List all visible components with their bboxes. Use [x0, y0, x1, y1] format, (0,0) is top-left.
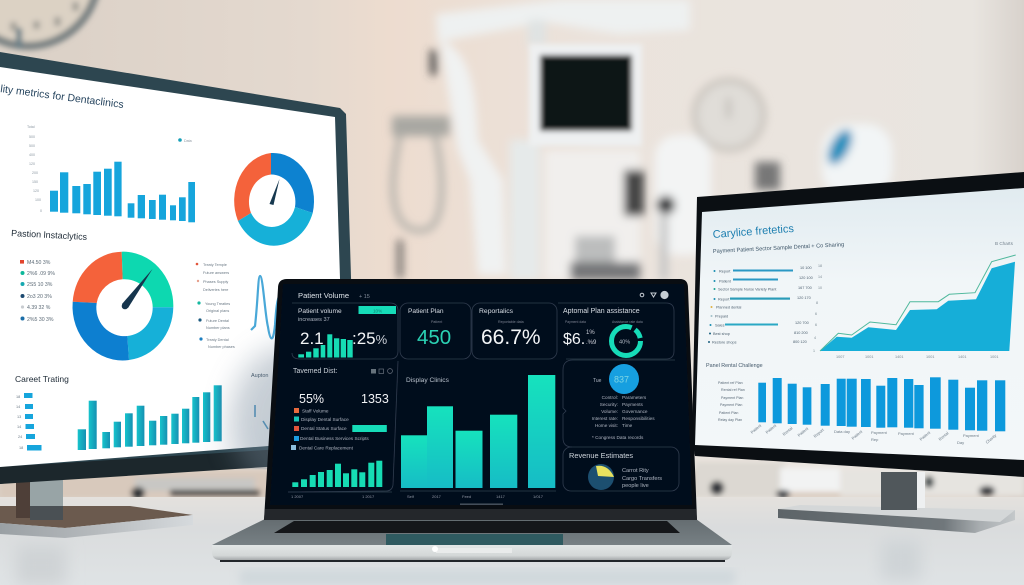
card: patient volume: increases 37 [298, 317, 330, 323]
panel: revenue estimates: people live [622, 483, 649, 489]
panel: blue metric: Security: [600, 402, 618, 407]
panel: treatment data [288, 361, 398, 499]
area chart: 1007 [836, 355, 844, 359]
area chart: 1401 [895, 355, 903, 359]
metric list: 10 100 [800, 266, 812, 270]
panel: blue metric: Tue [593, 378, 602, 384]
metric list: 810 200 [794, 331, 808, 335]
side chart fragment: Aupton [251, 373, 268, 379]
right monitor stand [778, 472, 1015, 533]
rotated tick labels: Day [957, 440, 964, 445]
bar chart: bottom [78, 385, 222, 450]
panel: treatment data: 1 2017 [362, 494, 375, 499]
bar chart: top: Data [184, 139, 192, 143]
desk surface [0, 497, 1024, 585]
keyboard [274, 521, 680, 533]
panel: blue metric: Interest rate: [592, 416, 618, 421]
panel: blue metric: Responsibilities [622, 416, 655, 421]
panel: blue metric: Volume: [601, 409, 618, 414]
panel: blue metric: 837 [614, 374, 629, 384]
side legend: Treaty Dental [206, 338, 229, 342]
row labels: Rental ref Plan [721, 388, 745, 392]
card: optimal plan assistance [558, 303, 674, 359]
area chart: 14 [818, 275, 822, 279]
rotated tick labels: Payment [963, 433, 980, 438]
metric list: Best shop [713, 332, 730, 336]
panel: blue metric: * Congress Data records [592, 435, 644, 440]
mini horizontal bars [16, 393, 42, 450]
left monitor stand [0, 478, 193, 538]
side chart fragment [251, 373, 268, 429]
donut legend: 2о3 20 3% [27, 294, 52, 300]
panel: blue metric: Time [622, 423, 633, 428]
panel: display clinics chart: 1417 [496, 494, 506, 499]
side legend: Original plans [206, 309, 229, 313]
panel: blue metric: Parameters [622, 395, 647, 400]
row labels [718, 381, 745, 422]
rotated tick labels: Patient [749, 422, 763, 435]
laptop lid [264, 279, 697, 520]
sparkline [251, 276, 280, 338]
side legend: Young Treaties [205, 302, 230, 306]
left monitor screen [0, 67, 345, 467]
panel: blue metric: Governance [622, 409, 648, 414]
bar chart: top: 120 [33, 189, 39, 193]
area chart: 4 [814, 336, 816, 340]
dashboard title: Patient Volume [298, 291, 349, 300]
metric list: Restore shops [712, 340, 737, 344]
area chart: 10 [818, 286, 822, 290]
metric list: Prepaid [715, 314, 728, 318]
row labels: Payment Plan [720, 403, 742, 407]
panel: treatment data: Staff Volume [302, 408, 329, 413]
wall clock, top left [0, 0, 98, 48]
panel: display clinics chart: Display Clinics [406, 377, 450, 384]
wall clock, centre top [692, 78, 766, 152]
rotated tick labels: Rep [871, 437, 879, 442]
bar chart: top: 120 [29, 162, 35, 166]
rotated tick labels: Charity [984, 433, 997, 445]
left monitor [0, 52, 356, 538]
card: optimal plan assistance: Assistance rate data [612, 320, 643, 324]
screen title: Carylice fretetics [712, 223, 795, 241]
laptop chin [264, 509, 697, 520]
area chart: 1401 [958, 355, 966, 359]
toolbar icons [640, 291, 668, 299]
row labels: Relay day Plan [718, 418, 742, 422]
panel: blue metric [563, 360, 675, 447]
panel: treatment data: Dental Business Services Scripts [300, 436, 369, 441]
card: patient volume: 2.1 [300, 329, 324, 348]
rotated tick labels: Patient [764, 422, 778, 435]
area chart: 18 [818, 264, 822, 268]
bar chart: top [27, 125, 195, 222]
card: reportalics: 66.7% [481, 326, 541, 349]
panel: treatment data: 1 2007 [291, 494, 304, 499]
bar chart: right monitor [758, 377, 1005, 431]
panel: treatment data: Dental Care Replacement [299, 446, 354, 451]
handpiece holder [624, 135, 711, 280]
metric list: 120 100 [799, 276, 813, 280]
panel: treatment data: Display Dental Surface [301, 417, 349, 422]
rotated tick labels: Rental [781, 425, 794, 437]
mini horizontal bars: 18 [19, 446, 23, 450]
vertical arm pipe [392, 40, 506, 275]
metric list: Sector Sample Nurse Variety Plant [718, 288, 777, 292]
card: patient volume [292, 303, 398, 359]
panel: blue metric: Control: [602, 395, 618, 400]
card: patient plan: 450 [417, 326, 451, 349]
blue and white device [755, 124, 892, 196]
area chart: 1001 [865, 355, 873, 359]
bar chart: top: 0 [40, 209, 42, 213]
panel: treatment data: 1353 [361, 392, 389, 406]
bar chart: top: 100 [35, 198, 41, 202]
rotated tick labels: Payment [871, 430, 888, 435]
card: patient plan: Patient [431, 320, 442, 324]
panel: display clinics chart: Feed [462, 494, 471, 499]
panel: revenue estimates: Carrot Rity [622, 468, 649, 474]
bar chart: top: 150 [32, 180, 38, 184]
equipment cabinet [510, 140, 640, 280]
bar chart: top: 200 [32, 171, 38, 175]
card: optimal plan assistance: 1% [586, 330, 595, 336]
card: reportalics: Reportable data [498, 320, 524, 324]
hanging cables [393, 135, 442, 278]
card: optimal plan assistance: Payment data [565, 320, 586, 324]
rotated tick labels [749, 422, 997, 445]
dental arm [436, 0, 690, 46]
metric list [708, 266, 813, 344]
donut legend: 2%6 .09 9% [27, 271, 55, 277]
mini horizontal bars: 18 [16, 395, 20, 399]
card: patient plan [400, 303, 471, 359]
side legend [196, 263, 235, 349]
row labels: Payment Plan [721, 396, 743, 400]
area chart: 1001 [926, 355, 934, 359]
donut legend: 2S5 10 3% [27, 282, 53, 288]
panel: display clinics chart: 2017 [432, 494, 442, 499]
right monitor screen [695, 188, 1024, 460]
metric list: Sales [715, 324, 725, 328]
panel: display clinics chart [400, 375, 556, 499]
area chart [813, 255, 1016, 359]
bar chart: top: 500 [29, 135, 35, 139]
rotated tick labels: Payment [898, 431, 915, 436]
area behind monitors [0, 462, 1024, 499]
area chart: 6 [815, 323, 817, 327]
left monitor bezel [0, 52, 356, 484]
card: reportalics [472, 303, 557, 359]
row labels: Patient Plan [719, 411, 738, 415]
section heading: bottom chart: Panel Rental Challenge [706, 363, 763, 369]
mini horizontal bars: 24 [18, 435, 22, 439]
metric list: Patient [719, 280, 732, 284]
side legend: Deliveries here [203, 288, 228, 292]
panel: display clinics chart: Self [407, 494, 415, 499]
card: optimal plan assistance: $6. [563, 331, 585, 348]
panel: blue metric: Home visit: [595, 423, 618, 428]
touchpad [386, 534, 563, 545]
card: patient volume: 10% [373, 308, 382, 313]
panel: revenue estimates: Cargo Transfers [622, 476, 662, 482]
metric list: Planned dental [716, 306, 741, 310]
donut legend: M4.50 3% [27, 260, 51, 266]
side legend: Future Dental [206, 319, 229, 323]
right monitor bezel [692, 172, 1024, 477]
donut legend [20, 260, 55, 323]
laptop base [212, 519, 732, 562]
mini horizontal bars: 13 [17, 415, 21, 419]
card: patient plan: Patient Plan [408, 308, 444, 315]
screen title: lity metrics for Dentaclinics [0, 83, 124, 111]
metric list: 800 120 [793, 340, 807, 344]
donut legend: 4.39 32 % [27, 305, 51, 311]
panel: treatment data: Tavemed Dist: [293, 368, 337, 375]
card: patient volume: Patient volume [298, 308, 342, 315]
panel: display clinics chart: 1/017 [533, 494, 544, 499]
screen subtitle: Payment Patient Sector Sample Dental + Co Sharing [713, 242, 844, 255]
bar chart: top: 400 [29, 153, 35, 157]
chart key: B Charts [995, 241, 1014, 246]
section heading: patient analytics: Pastion lnstaclytics [11, 228, 88, 242]
metric list: Report [719, 270, 731, 274]
side legend: Phases Supply [203, 280, 228, 284]
rotated tick labels: Patient [918, 429, 932, 442]
panel: blue metric: Payments [622, 402, 643, 407]
mini horizontal bars: 14 [17, 425, 21, 429]
panel: treatment data: 55% [299, 392, 324, 406]
card: optimal plan assistance: Aptomal Plan assistance [563, 308, 640, 315]
card: optimal plan assistance: 40% [619, 340, 630, 346]
panel: revenue estimates [563, 447, 679, 491]
metric list: 167 700 [798, 286, 812, 290]
row labels: Patient ref Plan [718, 381, 743, 385]
metric list: 120 700 [795, 321, 809, 325]
shadow across screen [220, 336, 275, 470]
area chart: 1001 [990, 355, 998, 359]
card: patient volume: :25% [352, 329, 388, 348]
panel: revenue estimates: Revenue Estimates [569, 451, 633, 460]
bar chart: top: Total [27, 125, 35, 129]
home indicator [460, 504, 503, 505]
side legend: Number phases [208, 345, 235, 349]
card: optimal plan assistance: .%9 [586, 340, 597, 346]
rotated tick labels: Report [812, 427, 826, 439]
rotated tick labels: Patient [796, 425, 810, 438]
title suffix: + 15 [359, 294, 370, 300]
front notch [432, 546, 512, 553]
laptop [212, 279, 732, 562]
panel: treatment data: Dental Status Surface [301, 426, 347, 431]
donut gauge: top [234, 153, 314, 246]
metric list: Report [718, 298, 730, 302]
rotated tick labels: Rental [937, 430, 950, 442]
card: reportalics: Reportalics [479, 308, 514, 315]
background monitor [529, 44, 642, 146]
area chart: 1 [813, 349, 815, 353]
area chart: 6 [815, 312, 817, 316]
area chart: 8 [816, 301, 818, 305]
right monitor [692, 172, 1024, 533]
metric list: 120 170 [797, 296, 811, 300]
side legend: Number plans [206, 326, 230, 330]
laptop screen [270, 284, 692, 505]
section heading: careet trading: Careet Trating [15, 374, 69, 384]
donut gauge: patient analytics [73, 252, 173, 360]
side legend: Future answers [203, 271, 229, 275]
mini horizontal bars: 14 [16, 405, 20, 409]
side legend: Treaty Temple [203, 263, 227, 267]
rotated tick labels: Data day [834, 429, 850, 434]
bar chart: top: 500 [29, 144, 35, 148]
donut legend: 2%5 30 3% [27, 317, 54, 323]
rotated tick labels: Patient [850, 428, 864, 441]
lower left bezel shading [0, 445, 345, 484]
